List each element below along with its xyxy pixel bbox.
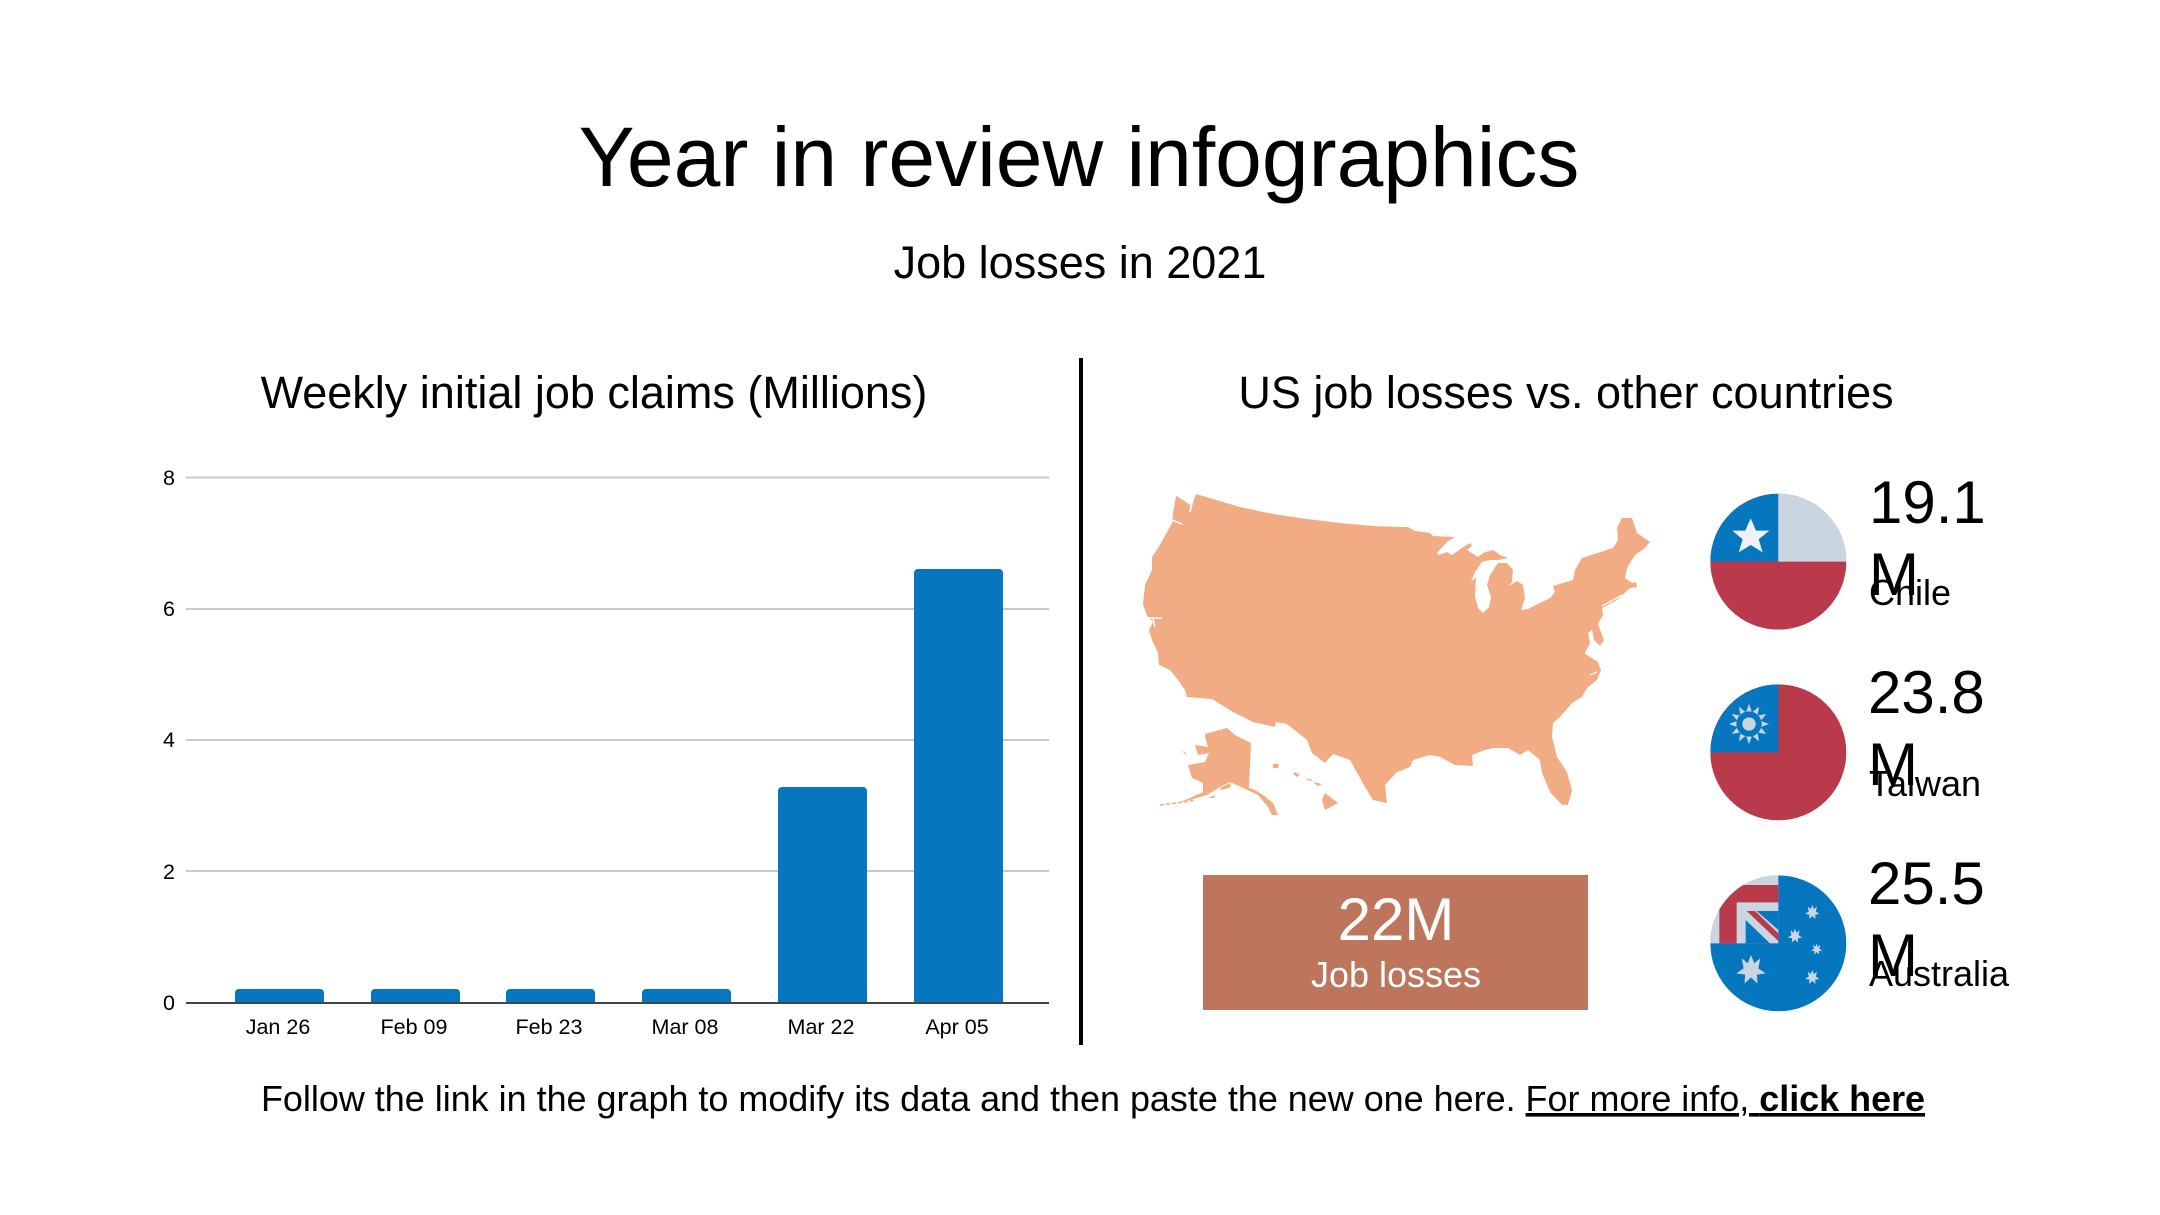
bar chart: Mar 08 (652, 1015, 718, 1039)
stat: Chile: 19.1 (1869, 469, 1986, 536)
bar chart: 4 (163, 728, 175, 752)
bar chart: 2 (163, 860, 175, 884)
heading: comparison: US job losses vs. other countries (1238, 367, 1894, 418)
flag: Chile (1710, 494, 1846, 630)
bar chart: Mar 22 (788, 1015, 854, 1039)
stat: Chile: M (1869, 541, 1919, 608)
flag: Australia (1710, 875, 1846, 1011)
stat: Australia: Australia (1869, 953, 2010, 994)
bar chart: Apr 05 (925, 1015, 989, 1039)
bar chart: Jan 26 (246, 1015, 310, 1039)
stat: Chile: Chile (1869, 572, 1951, 613)
bar chart: Feb 23 (516, 1015, 583, 1039)
stat: Taiwan: Taiwan (1869, 763, 1981, 804)
callout: 22M job losses (1203, 875, 1588, 1010)
stat: Australia: 25.5 (1868, 850, 1985, 917)
map: United States (1143, 494, 1650, 815)
subtitle: Job losses in 2021 (894, 237, 1266, 288)
bar chart: 0 (163, 991, 175, 1015)
callout: 22M job losses: 22M (1338, 886, 1454, 953)
stat: Australia: M (1868, 922, 1918, 989)
stat: Taiwan: M (1868, 731, 1918, 798)
title: Year in review infographics (579, 110, 1579, 204)
stat: Australia (1868, 850, 2010, 994)
stat: Taiwan (1868, 659, 1985, 804)
callout: 22M job losses: Job losses (1311, 954, 1481, 995)
heading: weekly claims: Weekly initial job claims (Millions) (261, 367, 927, 418)
flag: Taiwan (1710, 684, 1846, 820)
footer note: Follow the link in the graph to modify its data and then paste the new one here. For more info, click here (261, 1078, 1925, 1119)
bar chart (163, 466, 1049, 1039)
stat: Taiwan: 23.8 (1868, 659, 1985, 726)
stat: Chile (1869, 469, 1986, 613)
bar chart: 6 (163, 597, 175, 621)
bar chart: 8 (163, 466, 175, 490)
bar chart: Feb 09 (381, 1015, 447, 1039)
divider (1079, 358, 1083, 1045)
